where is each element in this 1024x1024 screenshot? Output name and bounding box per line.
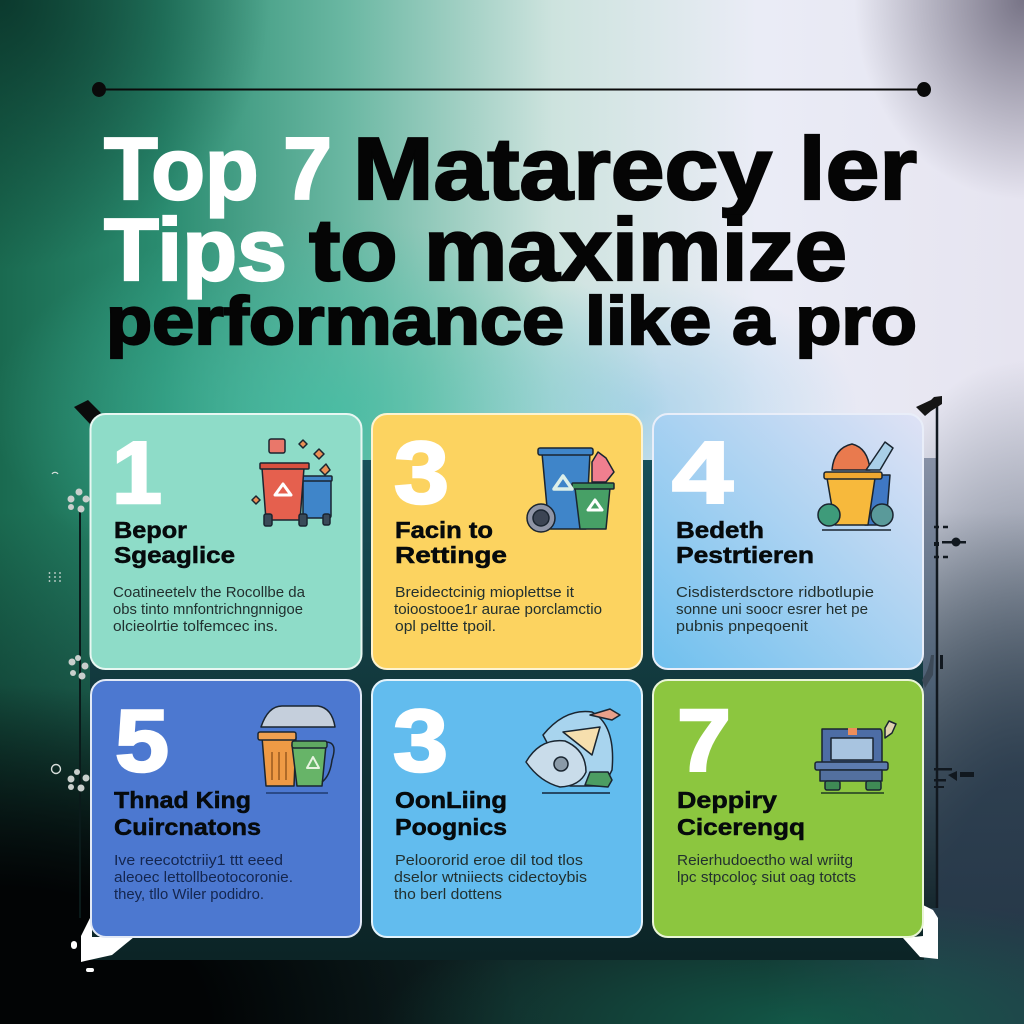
body text: Coatineetelv the Rocollbe da: [113, 585, 306, 601]
body text: Ive reecotctriiy1 ttt eeed: [114, 853, 283, 869]
icon: lidded bins: [258, 706, 335, 793]
frame lines and corner brackets: [71, 396, 942, 972]
heading: Pestrtieren: [676, 542, 814, 568]
icon: overflowing bin: [818, 442, 893, 530]
icon: round washer: [526, 709, 620, 793]
number 7: 7: [677, 691, 731, 790]
title: to maximize: [309, 200, 847, 299]
body text: they, tllo Wiler podidro.: [114, 887, 264, 903]
heading: Bepor: [114, 517, 187, 543]
panel: tip 5: [372, 680, 642, 937]
panel: tip 3: [653, 414, 923, 669]
panel: tip 4: [91, 680, 361, 937]
panel: tip 6: [653, 680, 923, 937]
heading: Bedeth: [676, 517, 764, 543]
number 3: 3: [393, 691, 448, 790]
panel: tip 1: [90, 414, 362, 669]
left side decorations: [49, 472, 90, 792]
number 3: 3: [394, 423, 449, 522]
right side decorations: [922, 527, 974, 788]
body text: sonne uni soocr esrer het pe: [676, 602, 868, 618]
heading: Facin to: [395, 517, 493, 543]
number 4: 4: [672, 423, 733, 522]
body text: Peloororid eroe dil tod tlos: [395, 853, 583, 869]
body text: dselor wtniiects cidectoybis: [394, 870, 587, 886]
body text: aleoec lettollbeotocoronie.: [114, 870, 293, 886]
body text: obs tinto mnfontrichngnnigoe: [113, 602, 303, 618]
body text: lpc stpcoloç siut oag totcts: [677, 870, 856, 886]
panel: tip 2: [372, 414, 642, 669]
body text: Reierhudoectho wal wriitg: [677, 853, 853, 869]
icon: recycling bins: [252, 439, 332, 526]
body text: pubnis pnpeqoenit: [676, 619, 808, 635]
body text: opl peltte tpoil.: [395, 619, 496, 635]
body text: toioostooe1r aurae porclamctio: [394, 602, 602, 618]
body text: Cisdisterdsctore ridbotlupie: [676, 585, 874, 601]
top rule with end dots: [92, 82, 931, 97]
heading: Thnad King: [114, 787, 251, 813]
body text: olcieolrtie tolfemcec ins.: [113, 619, 278, 635]
heading: Sgeaglice: [114, 542, 235, 568]
heading: Poognics: [395, 814, 507, 840]
body text: Breidectcinig mioplettse it: [395, 585, 574, 601]
number 1: 1: [112, 423, 162, 522]
title: performance like a pro: [106, 283, 917, 359]
title: Tips: [104, 200, 287, 299]
body text: tho berl dottens: [394, 887, 502, 903]
number 5: 5: [115, 691, 169, 790]
heading: Deppiry: [677, 787, 777, 813]
heading: Cuircnatons: [114, 814, 261, 840]
icon: cart machine: [815, 721, 896, 793]
dark backing behind cards: [90, 458, 938, 960]
icon: bins with wheel: [527, 448, 614, 532]
title: Matarecy ler: [353, 119, 917, 218]
title: [104, 119, 917, 359]
heading: Rettinge: [395, 542, 507, 568]
heading: OonLiing: [395, 787, 507, 813]
heading: Cicerengq: [677, 814, 805, 840]
title: Top 7: [104, 119, 332, 218]
